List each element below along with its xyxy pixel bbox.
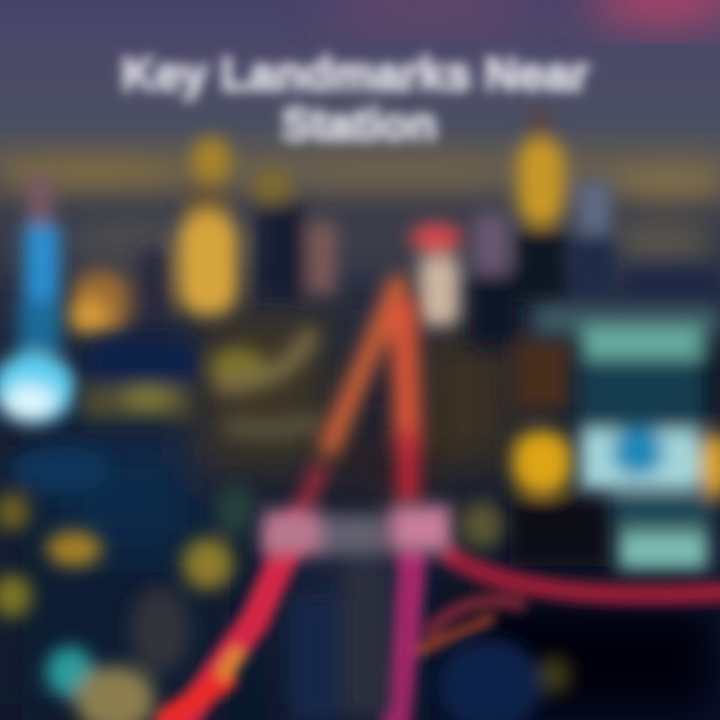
sky glow: pink top right — [320, 0, 720, 20]
title — [121, 47, 589, 150]
landmark: blue tower left — [0, 175, 76, 424]
landmark: golden tower left of centre — [68, 138, 336, 336]
city mass: dark lower blocks — [0, 310, 720, 720]
landmark: teal building right — [535, 305, 720, 570]
bright junction: pink and white lights — [260, 505, 452, 720]
arrow-like light trails: orange road — [292, 285, 408, 530]
landmark: red and white tower centre — [410, 223, 462, 326]
title: Station — [281, 98, 437, 150]
light trails: red road lower — [165, 530, 720, 720]
lower-left building lights — [0, 446, 571, 720]
skyline: distant city lights band — [0, 158, 720, 270]
title: Key Landmarks Near — [121, 47, 589, 100]
landmark: golden tower right — [468, 110, 720, 566]
landmark: dark domed building left — [82, 330, 320, 429]
